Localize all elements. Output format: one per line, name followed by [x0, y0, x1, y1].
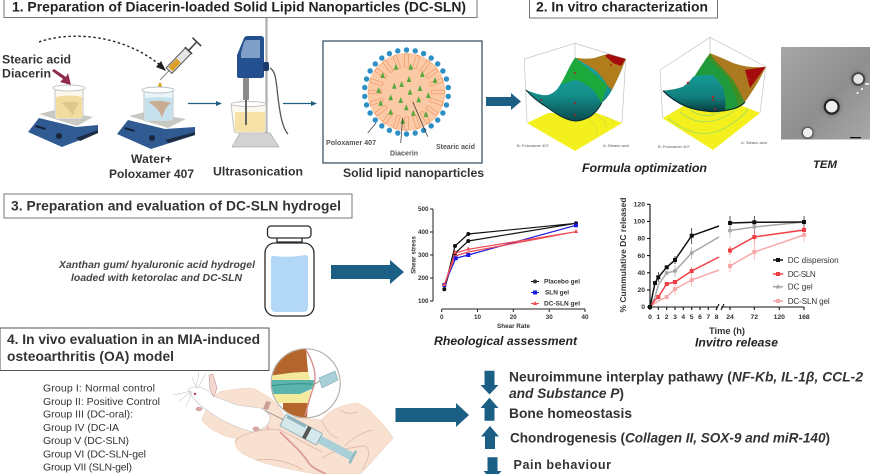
particle labels: Stearic acid: [436, 144, 475, 151]
chart: in vitro release: Time (h): [709, 326, 745, 336]
chart: rheology: 300: [418, 252, 429, 259]
chart: in vitro release: 3: [673, 314, 677, 321]
chart: in vitro release: 80: [637, 236, 645, 243]
arrow: to ultrasonication: [188, 101, 222, 106]
label: ultrasonication: Ultrasonication: [213, 164, 303, 178]
chart: in vitro release: 120: [774, 314, 785, 321]
chart: in vitro release: 0: [641, 304, 645, 311]
rheology legend: SLN gel: [545, 290, 569, 297]
heading 4: osteoarthritis (OA) model: [7, 349, 174, 364]
treatment groups list: Group VII (SLN-gel): [43, 462, 132, 474]
particle labels: Poloxamer 407: [326, 140, 376, 147]
rheology legend: [531, 279, 580, 308]
outcome: chondrogenesis: Chondrogenesis (Collagen II, SOX-9 and miR-140): [510, 431, 830, 446]
rheology legend: DC-SLN gel: [544, 301, 580, 308]
chart: rheology: 0: [440, 314, 444, 321]
chart: in vitro release: 40: [637, 270, 645, 277]
rheology legend: Placebo gel: [544, 279, 580, 286]
chart: rheology: Shear Rate: [497, 323, 530, 330]
pointer lines: [368, 102, 428, 143]
treatment groups list: [43, 383, 160, 474]
caption: rheological assessment: Rheological assessment: [434, 334, 578, 348]
chart: rheology: [410, 206, 589, 330]
arrow: to characterization: [486, 93, 521, 110]
treatment groups list: Group I: Normal control: [43, 383, 155, 395]
panel: hydrogel: [4, 194, 839, 350]
panel: in vivo evaluation: [0, 328, 863, 474]
arrow: to hydrogel results: [331, 260, 404, 284]
chart: in vitro release: 0: [648, 314, 652, 321]
chart: in vitro release: [618, 198, 839, 336]
illustration: mouse injection: [173, 349, 393, 474]
chart: in vitro release: 4: [681, 314, 685, 321]
arrow: to nanoparticles: [283, 101, 317, 106]
heading 4: 4. In vivo evaluation in an MIA-induced: [7, 332, 260, 347]
release legend: DC gel: [788, 283, 813, 292]
chart: rheology: 20: [510, 314, 517, 321]
release legend: DC-SLN gel: [788, 297, 830, 306]
outcome: neuroimmune pathway: and Substance P): [509, 386, 624, 401]
outcome: neuroimmune pathway: Neuroimmune interplay pathawy (NF-Kb, IL-1β, CCL-2: [509, 370, 863, 385]
outcome: chondrogenesis: [481, 426, 830, 449]
response surface plot 1: B: Poloxamer 407: [517, 143, 550, 148]
hydrogel description: [58, 260, 256, 284]
treatment groups list: Group VI (DC-SLN-gel: [43, 448, 146, 460]
chart: in vitro release: 2: [665, 314, 669, 321]
lipid tails: [368, 54, 444, 130]
arrow: to outcomes: [396, 403, 469, 427]
heading 3: 3. Preparation and evaluation of DC-SLN hydrogel: [11, 198, 341, 214]
label: water and poloxamer: Poloxamer 407: [109, 167, 194, 181]
outcome: bone homeostasis: [480, 398, 632, 421]
chart: in vitro release: 7: [706, 314, 710, 321]
caption: invitro release: Invitro release: [695, 336, 778, 350]
chart: in vitro release: 72: [751, 314, 758, 321]
treatment groups list: Group II: Positive Control: [43, 396, 160, 408]
label: water and poloxamer: [109, 152, 194, 181]
hydrogel description: loaded with ketorolac and DC-SLN: [71, 273, 242, 284]
panel: in vitro characterization: [517, 0, 870, 175]
chart: in vitro release: 24: [726, 314, 734, 321]
chart: in vitro release: 120: [634, 202, 645, 208]
label: solid lipid nanoparticles: Solid lipid nanoparticles: [343, 166, 484, 180]
chart: rheology: 500: [418, 206, 429, 213]
outcome: neuroimmune pathway: [480, 370, 863, 401]
response surface plot 2: B: Poloxamer 407: [658, 144, 691, 149]
release legend: DC-SLN: [788, 270, 816, 279]
chart: in vitro release: 1: [656, 314, 660, 321]
chart: in vitro release: 8: [715, 314, 719, 321]
particle labels: [326, 140, 475, 157]
chart: rheology: 200: [418, 275, 429, 282]
chart: rheology: 100: [418, 298, 429, 305]
icon: hydrogel bottle: [265, 226, 314, 316]
chart: in vitro release: 6: [698, 314, 702, 321]
chart: rheology: Shear stress: [410, 236, 418, 274]
chart: rheology: 400: [418, 229, 429, 236]
heading 4: [0, 328, 269, 370]
chart: in vitro release: 168: [798, 314, 810, 321]
icon: hot plate with water beaker: [117, 87, 195, 149]
treatment groups list: Group IV (DC-IA: [43, 422, 119, 434]
label: stearic acid and diacerin: [2, 52, 71, 80]
response surface plot 2: A: Stearic acid: [741, 140, 767, 145]
chart: rheology: 30: [546, 314, 553, 321]
response surface plot 2: [658, 37, 767, 150]
hydrogel description: Xanthan gum/ hyaluronic acid hydrogel: [58, 260, 256, 271]
poloxamer heads: [362, 47, 451, 137]
chart: rheology: 10: [474, 314, 481, 321]
icon: hot plate with lipid beaker: [28, 85, 98, 147]
chart: in vitro release: % Cummulative DC released: [618, 198, 628, 312]
particle labels: Diacerin: [390, 150, 418, 157]
response surface plot 1: [517, 43, 629, 151]
outcome: pain behaviour: Pain behaviour: [514, 458, 611, 472]
icon: syringe: [156, 38, 201, 84]
treatment groups list: Group III (DC-oral):: [43, 409, 133, 421]
response surface plot 1: A: Stearic acid: [603, 143, 629, 148]
label: water and poloxamer: Water+: [131, 152, 172, 166]
icon: maroon arrow: [52, 69, 71, 85]
label: stearic acid and diacerin: Stearic acid: [2, 52, 71, 66]
release legend: DC dispersion: [788, 256, 839, 265]
chart: in vitro release: 60: [637, 253, 645, 260]
chart: in vitro release: 5: [690, 314, 694, 321]
release legend: [773, 256, 839, 306]
nanoparticle core: [368, 53, 446, 131]
outcome: bone homeostasis: Bone homeostasis: [509, 406, 632, 421]
panel: nanoparticle diagram: [323, 41, 482, 163]
chart: rheology: 40: [581, 314, 589, 321]
icon: ultrasonicator: [231, 18, 288, 147]
caption: TEM: TEM: [813, 159, 838, 171]
panel: preparation of DC-SLN: [2, 0, 484, 181]
outcome: pain behaviour: [484, 457, 611, 474]
chart: in vitro release: 20: [637, 287, 645, 294]
icon: drops: [158, 82, 162, 98]
chart: in vitro release: 100: [634, 219, 645, 226]
diacerin triangles: [376, 64, 437, 124]
label: stearic acid and diacerin: Diacerin: [2, 66, 51, 80]
treatment groups list: Group V (DC-SLN): [43, 435, 129, 447]
dashed transfer arrow: [39, 36, 166, 71]
caption: formula optimization: Formula optimization: [582, 161, 707, 175]
heading 3: [4, 194, 352, 218]
TEM micrograph: [781, 47, 870, 142]
